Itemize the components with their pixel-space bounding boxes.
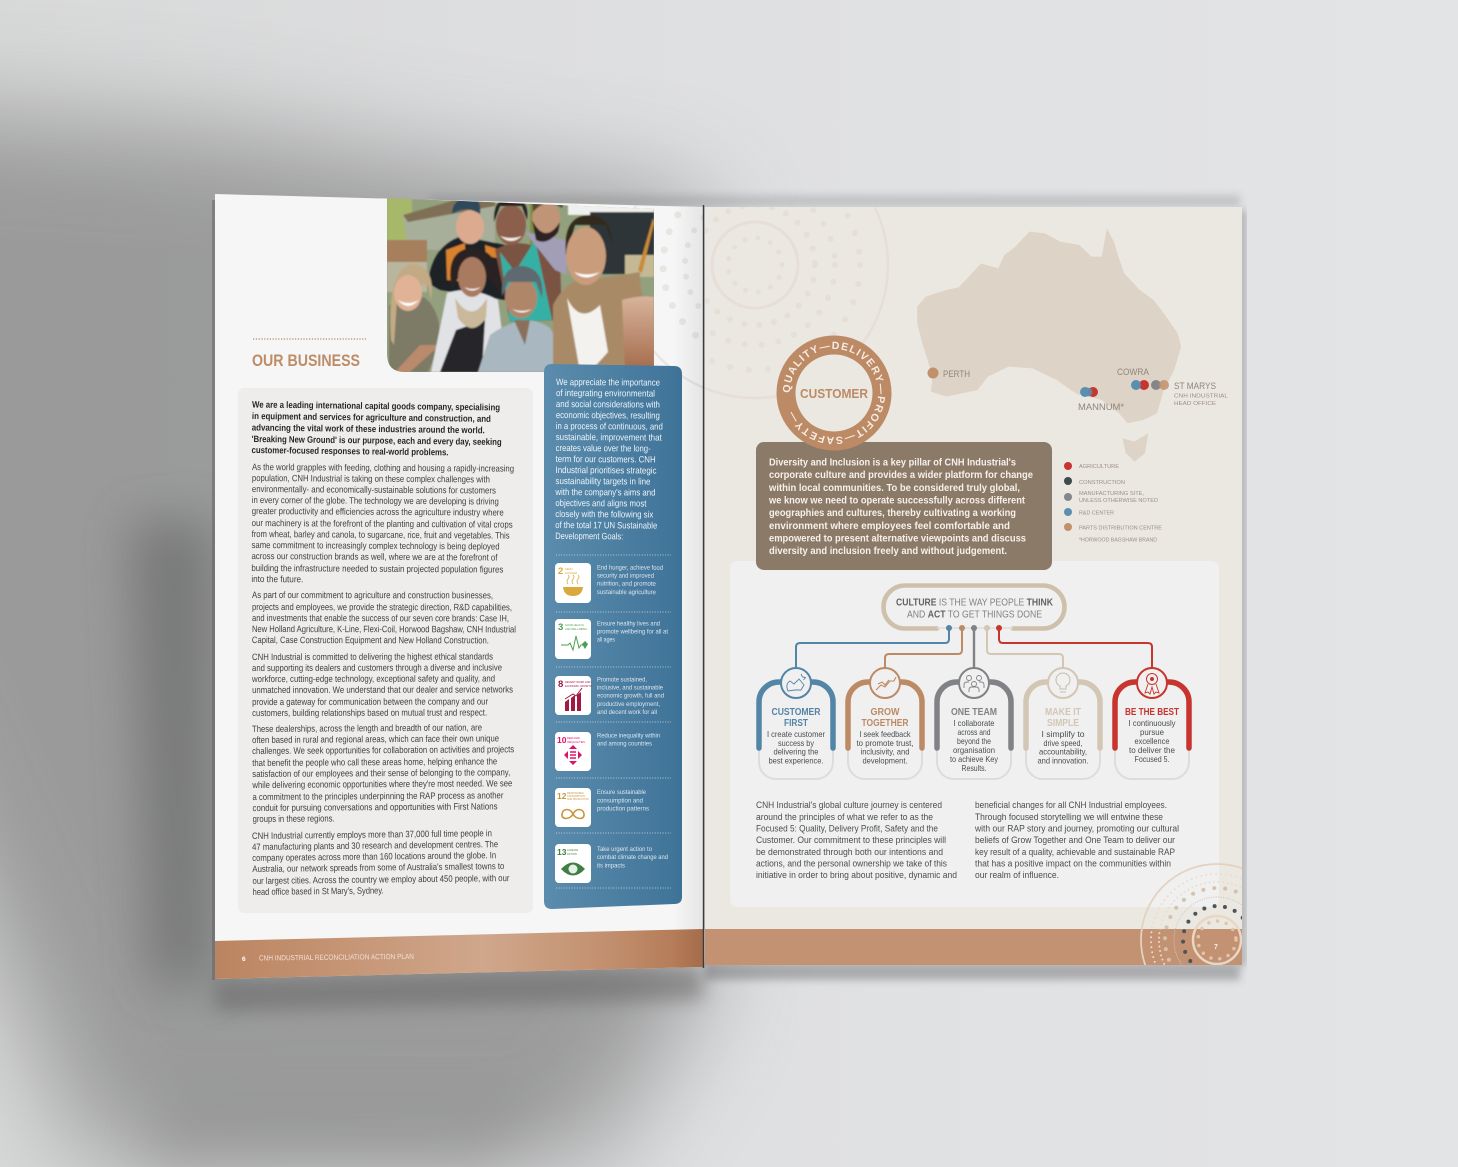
panel intro text: We appreciate the importance [556, 377, 660, 388]
intro paragraph [251, 400, 502, 458]
panel intro text: and social considerations with [556, 399, 660, 410]
goal 13: climate action: ACTION [567, 852, 577, 856]
photo background [387, 197, 412, 242]
goal 12: responsible consumption: CONSUMPTION [567, 795, 585, 798]
paragraph: ethical standards [251, 651, 513, 718]
goal 12: responsible consumption: Ensure sustainable [597, 789, 646, 796]
paragraph: employees: CNH Industrial currently employs more than 37,000 full time people in [252, 828, 492, 841]
panel intro text: closely with the following six [555, 509, 654, 520]
card: grow together: GROW [870, 707, 900, 718]
map legend: *HORWOOD BAGSHAW BRAND [1079, 538, 1157, 544]
paragraph: world grapples: across our construction brands as well, where we are at the forefront of [251, 551, 498, 563]
card: grow together: to promote trust, [856, 739, 914, 748]
left page [215, 194, 703, 979]
panel intro text: sustainable, improvement that [556, 432, 662, 443]
heading: our business: OUR BUSINESS [252, 352, 360, 370]
icon: team [959, 668, 989, 698]
map label: Mannum [1078, 387, 1124, 413]
card: make it simple: I simplify to [1042, 730, 1085, 739]
map label: Mannum: MANNUM* [1078, 402, 1124, 413]
goal 8: decent work: inclusive, and sustainable [597, 684, 663, 692]
icon: growth [870, 668, 900, 698]
photo: group selfie [387, 197, 654, 372]
text column 2: that has a positive impact on the communities within [975, 858, 1171, 868]
culture pill: AND ACT TO GET THINGS DONE [907, 610, 1042, 620]
right page [702, 205, 1242, 968]
card: one team: organisation [953, 746, 995, 755]
map label: Cowra [1117, 367, 1150, 390]
text column 2: beliefs of Grow Together and One Team to deliver our [975, 835, 1175, 845]
panel intro text: objectives and aligns most [555, 498, 647, 508]
goal 12: responsible consumption: AND PRODUCTION [567, 798, 589, 801]
card: one team: across and [958, 728, 991, 737]
panel: culture [730, 561, 1219, 907]
panel intro text: of the total 17 UN Sustainable [555, 520, 657, 531]
panel intro text: Development Goals: [555, 531, 623, 541]
badge: focused 5 ring: CUSTOMER [800, 386, 869, 401]
intro paragraph: 'Breaking New Ground' is our purpose, each and every day, seeking [252, 434, 502, 447]
goal 10: reduced inequalities: 10 [557, 735, 567, 745]
map label: St Marys: ST MARYS [1174, 381, 1216, 392]
paragraph: employees: company operates across more than 160 locations around the globe. In [252, 850, 496, 863]
paragraph: world grapples: same commitment to increasingly complex technology is being deployed [252, 540, 500, 552]
footer band: right page [705, 929, 1242, 965]
person: beard [525, 232, 567, 275]
person: back centre with cap [428, 236, 505, 300]
map of Australia [917, 228, 1181, 462]
text column 1: CNH Industrial's global culture journey is centered [756, 800, 942, 810]
goal 2: zero hunger: sustainable agriculture [597, 589, 656, 596]
paragraph: ethical standards: unmatched innovation. We understand that our dealer and service networks [252, 684, 513, 695]
map label: St Marys: CNH INDUSTRIAL [1174, 394, 1228, 400]
paragraph: ethical standards: customers, building relationships based on mutual trust and respect. [252, 708, 487, 718]
card: make it simple: and innovation. [1038, 756, 1088, 766]
decorative dots: left page margin [634, 205, 703, 388]
goal 3: good health: promote wellbeing for all at [597, 628, 668, 636]
card: customer first: I create customer [767, 730, 825, 739]
goal 2: zero hunger: HUNGER [565, 571, 577, 575]
paragraph: world grapples: building the infrastructure needed to sustain projected population figures [251, 563, 504, 575]
card: be the best: Focused 5. [1134, 755, 1170, 764]
card: grow together: inclusivity, and [860, 748, 910, 756]
badge: focused 5 ring: QUALITY—DELIVERY—PROFIT—SAFETY— [782, 342, 886, 444]
paragraph: dealerships: satisfaction of our employees and their sense of belonging to the company, [252, 767, 510, 779]
card: customer first: success by [778, 739, 815, 748]
paragraph: dealerships: that benefit the people who call these areas home, helping enhance the [252, 756, 497, 768]
intro paragraph: customer-focused responses to real-world problems. [251, 445, 449, 457]
card: one team [937, 668, 1011, 779]
paragraph: dealerships: often based in rural and regional areas, which can face their own unique [252, 733, 499, 745]
panel: diversity and inclusion: within local communities. To be considered truly global, [768, 483, 1020, 494]
goal 2: zero hunger [555, 563, 663, 603]
goal 8: decent work: 8 [558, 679, 563, 690]
panel: diversity and inclusion: corporate culture and provides a wider platform for change [769, 470, 1033, 481]
connectors from pill to cards [796, 625, 1152, 668]
paragraph: commitment: New Holland Agriculture, K-Line, Flexi-Coil, Horwood Bagshaw, CNH Industrial [252, 624, 516, 634]
paragraph: world grapples: our machinery is at the forefront of the planting and cultivation of vital crops [252, 518, 513, 530]
intro paragraph: We are a leading international capital goods company, specialising [252, 400, 500, 412]
card: make it simple: MAKE IT [1045, 707, 1081, 718]
map legend: CONSTRUCTION [1079, 480, 1125, 486]
decorative dot rings: top left [705, 207, 889, 399]
paragraph: employees: our largest cities. Across the country we employ about 450 people, with our [252, 873, 510, 886]
person: centre curly [431, 290, 507, 372]
goal 10: reduced inequalities: INEQUALITIES [567, 740, 585, 744]
text column 1: actions, and the personal ownership we take of this [756, 858, 947, 868]
map legend: MANUFACTURING SITE, [1079, 491, 1144, 497]
text column 2: beneficial changes for all CNH Industrial employees. [975, 800, 1167, 810]
paragraph: employees [252, 828, 510, 897]
map legend: UNLESS OTHERWISE NOTED [1079, 498, 1158, 504]
paragraph: commitment: projects and employees, we provide the strategic direction, R&D capabilities, [252, 602, 512, 612]
cast shadow of the magazine [0, 105, 1246, 1167]
goal 10: reduced inequalities [555, 732, 660, 771]
map label: Cowra: COWRA [1117, 367, 1150, 378]
person: centre back [495, 243, 562, 322]
footer title: CNH INDUSTRIAL RECONCILIATION ACTION PLAN [259, 952, 414, 962]
paragraph: world grapples: from wheat, barley and canola, to sugarcane, rice, fruit and vegetables. This [252, 529, 510, 541]
culture pill: CULTURE IS THE WAY PEOPLE THINK [896, 598, 1053, 608]
person: blond left [389, 295, 440, 372]
text column 2: key result of a quality, achievable and sustainable RAP [975, 847, 1175, 857]
card: grow together: TOGETHER [862, 718, 908, 729]
goal 2: zero hunger: nutrition, and promote [597, 580, 656, 588]
paragraph: employees: Australia, our network spreads from some of Australia's smallest towns to [252, 861, 504, 874]
paragraph: world grapples: in every corner of the globe. The technology we are developing is driving [252, 495, 499, 507]
paragraph: dealerships: a commitment to the principles underpinning the RAP process as another [252, 790, 503, 802]
panel: diversity and inclusion: geographies and cultures, thereby cultivating a working [769, 508, 1016, 519]
paragraph: world grapples: population, CNH Industrial is taking on these complex challenges with [252, 473, 490, 484]
paragraph: world grapples: into the future. [251, 574, 303, 584]
goal 2: zero hunger: security and improved [597, 572, 654, 580]
map legend [1064, 462, 1162, 544]
map legend: AGRICULTURE [1079, 464, 1119, 470]
goal 8: decent work [555, 676, 664, 716]
goal 13: climate action: Take urgent action to [597, 846, 652, 853]
card: be the best: pursue [1140, 728, 1164, 737]
page number 6: 6 [242, 956, 246, 963]
goal 3: good health: GOOD HEALTH [565, 623, 584, 627]
paragraph: dealerships: conduit for pursuing conversations and opportunities with First Nations [252, 801, 498, 813]
paragraph: commitment: Capital, Case Construction Equipment and New Holland Construction. [252, 635, 489, 645]
card: be the best: I continuously [1128, 719, 1176, 728]
card: one team: beyond the [957, 737, 991, 746]
goal 13: climate action: CLIMATE [567, 848, 578, 852]
panel: diversity and inclusion: we know we need to operate successfully across different [768, 496, 1026, 506]
text column 1: Focused 5: Quality, Delivery Profit, Safety and the [756, 824, 938, 834]
map label: Perth: PERTH [943, 369, 970, 380]
intro paragraph: advancing the vital work of these industries around the world. [252, 422, 485, 435]
text column 2: Through focused storytelling we will entwine these [975, 812, 1163, 822]
paragraph: world grapples: greater productivity and efficiencies across the agriculture industry where [252, 506, 504, 518]
map legend: R&D CENTER [1079, 510, 1114, 516]
goal 13: climate action: 13 [557, 847, 567, 857]
card: one team: Results. [962, 764, 986, 773]
footer band: left page [215, 929, 703, 979]
card: grow together: development. [862, 756, 908, 766]
goal 12: responsible consumption: RESPONSIBLE [567, 792, 584, 795]
text column 1 [756, 800, 957, 880]
icon: handshake star [781, 668, 811, 698]
goal 13: climate action: its impacts [597, 862, 626, 870]
goal 2: zero hunger: ZERO [565, 567, 574, 571]
card: make it simple: accountability, [1039, 748, 1087, 756]
card: customer first: best experience. [768, 756, 824, 766]
goal 10: reduced inequalities: Reduce inequality within [597, 732, 660, 740]
paragraph: ethical standards: workforce, cutting-edge technology, exceptional safety and quality, and [251, 673, 495, 684]
card: grow together [848, 668, 922, 779]
card: one team: ONE TEAM [951, 707, 997, 718]
card: make it simple: SIMPLE [1047, 718, 1079, 729]
goal 2: zero hunger: End hunger, achieve food [597, 565, 663, 572]
paragraph: ethical standards: provide a gateway for communication between the company and our [252, 697, 488, 707]
card: be the best: excellence [1134, 737, 1170, 746]
panel intro text: sustainability targets in line [555, 476, 651, 486]
text column 1: Customer. Our commitment to these principles will [756, 835, 946, 845]
panel: diversity and inclusion [756, 442, 1052, 570]
card: one team: I collaborate [954, 719, 995, 728]
card: one team: to achieve Key [950, 755, 999, 764]
paragraph: world grapples: As the world grapples with feeding, clothing and housing a rapidly-increasing [252, 462, 514, 474]
icon: light bulb [1048, 668, 1078, 698]
goal 12: responsible consumption: 12 [557, 791, 567, 801]
goal 3: good health: AND WELL-BEING [565, 627, 587, 631]
card: make it simple: drive speed, [1044, 739, 1082, 748]
card: be the best: BE THE BEST [1125, 707, 1179, 718]
paragraph: dealerships: groups in these regions. [253, 813, 335, 824]
icon: award rosette [1137, 668, 1167, 698]
paragraph: dealerships: These dealerships, across the length and breadth of our nation, are [252, 722, 482, 734]
card: customer first: FIRST [784, 718, 808, 729]
card: customer first: CUSTOMER [772, 707, 820, 718]
panel: diversity and inclusion: diversity and inclusion freely and without judgement. [769, 546, 1007, 557]
map label: St Marys: HEAD OFFICE [1174, 401, 1216, 407]
goal 3: good health: Ensure healthy lives and [597, 620, 660, 628]
panel intro text: Industrial prioritises strategic [556, 465, 657, 476]
panel intro text: creates value over the long- [556, 443, 651, 453]
goal 10: reduced inequalities: and among countries [597, 740, 653, 748]
card: be the best: to deliver the [1129, 746, 1175, 755]
map label: St Marys [1151, 380, 1228, 407]
panel: UN sustainable development goals [544, 364, 682, 909]
panel intro text: term for our customers. CNH [556, 454, 656, 465]
panel intro text [554, 377, 663, 542]
paragraph: ethical standards: and supporting its dealers and customers through a diverse and inclusive [252, 662, 502, 673]
paragraph: dealerships: challenges. We seek opportunities for collaboration on activities and projects [252, 744, 514, 756]
paragraph: ethical standards: CNH Industrial is committed to delivering the highest ethical standards [252, 651, 493, 662]
card: customer first: delivering the [774, 748, 819, 756]
culture pill [883, 586, 1064, 628]
goal 10: reduced inequalities: REDUCED [567, 736, 580, 740]
card: be the best [1115, 668, 1189, 779]
card: grow together: I seek feedback [860, 730, 911, 739]
paragraph: commitment: and investments that enable the success of our seven core brands: Case IH, [252, 613, 509, 623]
goal 8: decent work: and decent work for all [597, 709, 657, 716]
goal 12: responsible consumption [555, 788, 650, 827]
panel: diversity and inclusion: empowered to present alternative viewpoints and discuss [769, 534, 1026, 544]
goal 13: climate action [555, 844, 668, 883]
goal 3: good health: 3 [558, 622, 563, 633]
panel: diversity and inclusion: Diversity and Inclusion is a key pillar of CNH Industrial's [769, 458, 1016, 468]
paragraph: commitment [252, 590, 516, 645]
text column 1: initiative in order to bring about positive, dynamic and [756, 870, 957, 880]
map label: Perth [928, 368, 970, 380]
goal 8: decent work: productive employment, [597, 701, 660, 708]
text column 2: our realm of influence. [975, 870, 1059, 880]
paragraph: commitment: As part of our commitment to agriculture and construction businesses, [252, 590, 493, 600]
goal 8: decent work: DECENT WORK AND [565, 680, 591, 684]
goal 8: decent work: Promote sustained, [597, 676, 647, 684]
paragraph: dealerships: while delivering economic opportunities where they're most needed. We see [251, 778, 512, 790]
panel: business text [238, 388, 533, 913]
paragraph: employees: head office based in St Mary's, Sydney. [253, 885, 384, 897]
panel intro text: in a process of continuous, and [556, 421, 663, 432]
paragraph: world grapples: environmentally- and economically-sustainable solutions for customers [252, 484, 496, 495]
text column 2 [974, 800, 1179, 880]
decorative dot circle: bottom right [1140, 863, 1242, 965]
panel: diversity and inclusion: environment where employees feel comfortable and [769, 521, 1010, 532]
dotted separators [556, 555, 671, 888]
person: beanie front [477, 320, 554, 372]
card: make it simple [1026, 668, 1100, 779]
paragraph: employees: 47 manufacturing plants and 30 research and development centres. The [252, 839, 498, 852]
panel intro text: economic objectives, resulting [556, 410, 660, 421]
panel intro text: of integrating environmental [556, 388, 655, 399]
text column 1: be demonstrated through both our intentions and [756, 847, 943, 857]
intro paragraph: in equipment and services for agriculture and construction, and [252, 411, 491, 424]
text column 2: with our RAP story and journey, promoting our cultural [974, 824, 1179, 834]
paragraph: world grapples [251, 462, 514, 586]
goal 3: good health [555, 619, 668, 659]
paragraph: dealerships [251, 722, 515, 824]
goal 8: decent work: ECONOMIC GROWTH [565, 684, 592, 688]
goal 13: climate action: combat climate change and [597, 854, 668, 861]
panel intro text: with the company's aims and [555, 487, 655, 498]
goal 3: good health: all ages [597, 636, 616, 644]
card: customer first [759, 668, 833, 779]
page number 7: 7 [1214, 944, 1218, 951]
heading rule [253, 338, 366, 340]
goal 8: decent work: economic growth, full and [597, 692, 664, 700]
map legend: PARTS DISTRIBUTION CENTRE [1079, 526, 1162, 532]
text column 1: around the principles of what we refer to as the [756, 812, 933, 822]
goal 12: responsible consumption: production patterns [597, 806, 650, 812]
person: front right [553, 272, 645, 372]
goal 12: responsible consumption: consumption and [597, 798, 643, 804]
goal 2: zero hunger: 2 [558, 566, 563, 577]
